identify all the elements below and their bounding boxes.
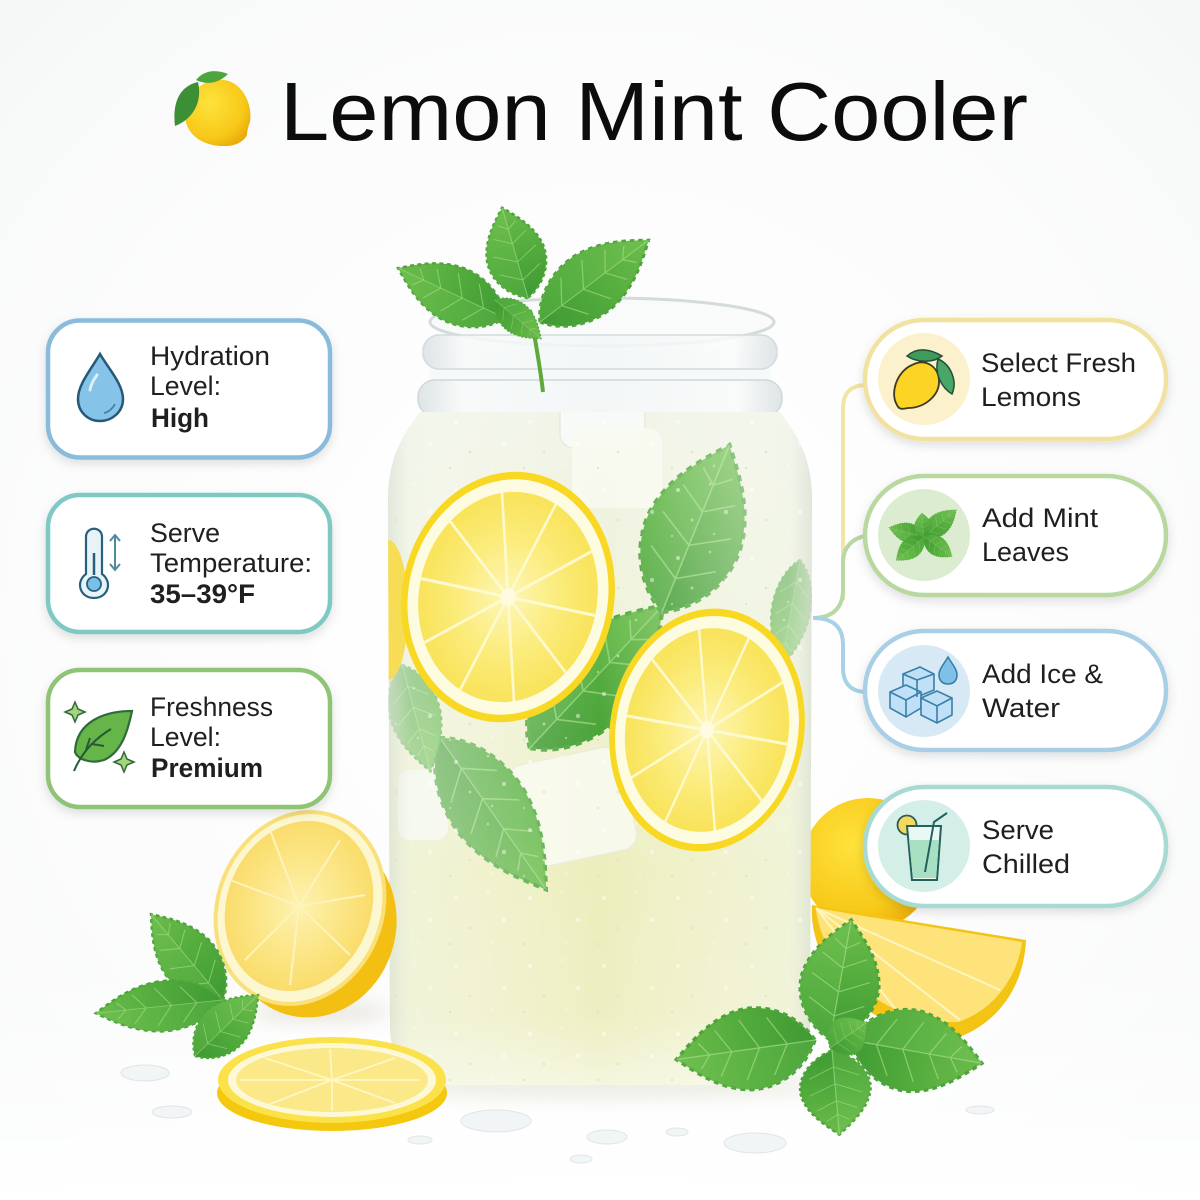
- text: freshness level: Premium: [151, 753, 263, 783]
- text: select fresh lemons: [981, 348, 1136, 412]
- card: hydration level: [48, 320, 330, 458]
- mint stem and top mint: [386, 200, 668, 392]
- step: add ice and water: [865, 631, 1166, 750]
- jar rim and neck: [418, 298, 782, 416]
- icon: title lemon: [174, 71, 250, 146]
- connector lines: [813, 385, 866, 692]
- icon: lemon: [878, 333, 970, 425]
- lemonade: [388, 412, 812, 1085]
- text: serve temperature: Temperature:: [150, 548, 312, 578]
- text: add ice and water: Add Ice &: [982, 659, 1103, 689]
- lemon slice on table: [217, 1037, 447, 1131]
- jar with lemonade: [368, 200, 825, 1099]
- text: serve chilled: Chilled: [982, 849, 1070, 879]
- text: hydration level: Hydration: [150, 341, 270, 371]
- lemon slices in jar: [378, 452, 824, 867]
- text: select fresh lemons: Lemons: [981, 382, 1081, 412]
- icon: mint leaves: [878, 489, 970, 581]
- text: serve temperature: [150, 518, 312, 609]
- text: serve temperature: Serve: [150, 518, 220, 548]
- icon: glass with straw: [878, 800, 970, 892]
- mint in jar: [388, 442, 812, 892]
- mint sprig left: [93, 896, 275, 1073]
- ice cubes: [398, 378, 662, 871]
- jar shadow: [375, 1071, 825, 1099]
- title: [174, 65, 1028, 158]
- text: add ice and water: Water: [982, 693, 1060, 723]
- card: serve temperature: [48, 495, 330, 632]
- lemon slice at jar edge: [388, 540, 406, 680]
- text: serve chilled: [982, 815, 1070, 879]
- card: freshness level: [48, 670, 330, 807]
- text: freshness level: Freshness: [150, 692, 273, 722]
- icon: thermometer: [80, 529, 120, 598]
- lemon wedge: [812, 905, 1026, 1036]
- text: select fresh lemons: Select Fresh: [981, 348, 1136, 378]
- mint sprig right: [671, 913, 989, 1138]
- text: serve chilled: Serve: [982, 815, 1054, 845]
- step: select fresh lemons: [865, 320, 1166, 439]
- text: add mint leaves: Leaves: [982, 537, 1069, 567]
- step: add mint leaves: [865, 476, 1166, 595]
- text: hydration level: Level:: [150, 371, 221, 401]
- water droplets: [121, 1065, 994, 1163]
- lemon behind jar: [802, 798, 934, 930]
- shadow: [250, 1002, 390, 1022]
- step: serve chilled: [865, 787, 1166, 906]
- text: hydration level: [150, 341, 270, 433]
- text: add mint leaves: [982, 503, 1099, 567]
- lemon half: [185, 784, 417, 1037]
- title text: Lemon Mint Cooler: [280, 65, 1028, 158]
- icon: leaf with sparkles: [65, 702, 134, 772]
- text: add mint leaves: Add Mint: [982, 503, 1099, 533]
- icon: ice cubes and drop: [878, 645, 970, 737]
- text: serve temperature: 35–39°F: [150, 579, 255, 609]
- text: add ice and water: [982, 659, 1103, 723]
- text: freshness level: Level:: [150, 722, 221, 752]
- icon: water drop: [78, 354, 123, 421]
- text: freshness level: [150, 692, 273, 783]
- text: hydration level: High: [151, 403, 209, 433]
